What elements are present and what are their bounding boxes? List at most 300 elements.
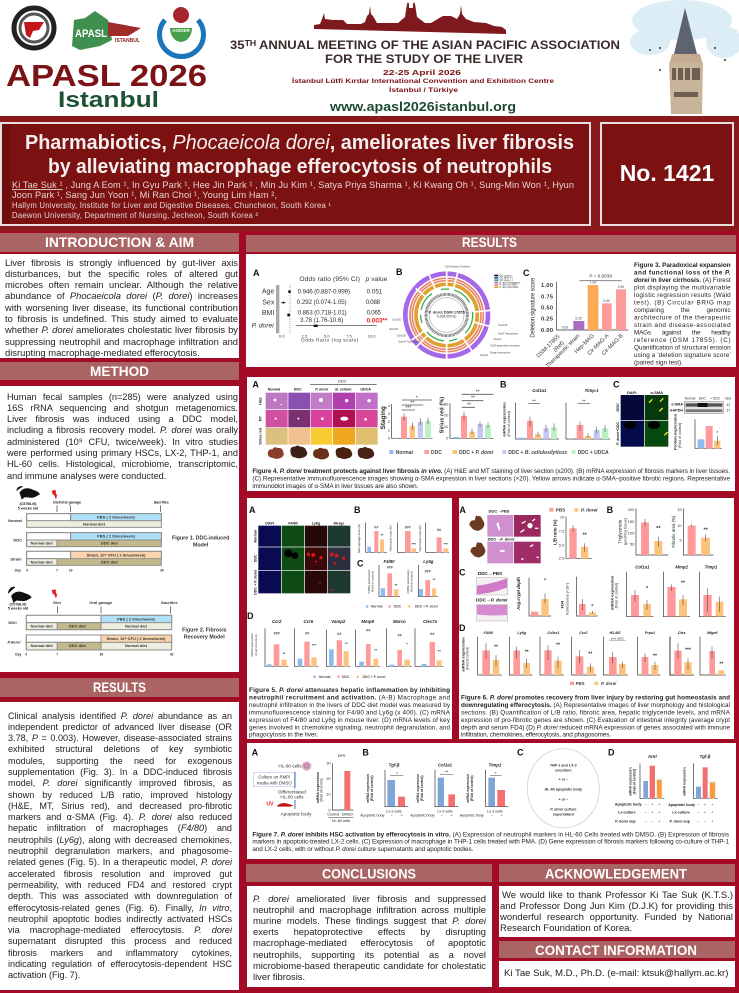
- panel C coculture diagram: [517, 748, 599, 828]
- immunofluorescence: [613, 379, 668, 447]
- authors: Joon Park ¹, Sang Jun Yoon ¹, Mi Ran Choi ¹, Young Lim Ham ²,: [12, 190, 277, 200]
- conference title line 2: FOR THE STUDY OF THE LIVER: [325, 52, 523, 66]
- mRNA charts panel C: **: [681, 580, 686, 586]
- panel B charts: Apoptotic body: [410, 813, 435, 817]
- header banner: [0, 0, 739, 116]
- Galata tower: [649, 8, 726, 114]
- conference venue: İstanbul Lütfi Kırdar International Convention and Exhibition Centre: [292, 77, 554, 85]
- panel: introduction text: microbes often remain unclear. Although the relative: [5, 279, 238, 290]
- western blot: kDa: [725, 396, 731, 400]
- crypt depth and FD4 charts: FD4: [559, 600, 564, 608]
- heading: acknowledgement: ACKNOWLEDGEMENT: [545, 866, 687, 882]
- panel D gene charts: D: [459, 623, 466, 633]
- heading: contact information: CONTACT INFORMATION: [535, 942, 697, 958]
- immunofluorescence grid: A: [249, 505, 256, 515]
- figure 1 schema: DDC diet: [101, 541, 118, 546]
- panel D charts: mRNA expression: [683, 767, 687, 796]
- immunofluorescence: DAPI: [627, 390, 636, 395]
- panel A chart: 10: [326, 792, 331, 797]
- figure 7 caption: and LX-2 cells, with or without P. dorei culture supernatants and apoptotic bodies.: [252, 846, 474, 853]
- panel D gene charts: mRNA expression: [460, 637, 465, 672]
- figure 6 caption: downregulating efferocytosis. (A) Representative images of liver morphology and histological: [461, 702, 730, 709]
- panel: results text: supernatant disrupted this process and reduced: [8, 936, 232, 946]
- heading: conclusions: CONCLUSIONS: [322, 866, 416, 882]
- panel B charts: +: [451, 813, 453, 817]
- mRNA charts panel C: *: [646, 586, 649, 592]
- histology grid: UDCA: [360, 388, 371, 392]
- mRNA charts panel C: (Fold of control): [615, 583, 619, 608]
- forest plot: Odds Ratio (log scale): [301, 338, 359, 343]
- figure 6 caption: depth and serum FD4) (D) P. dorei reduced mRNA expression of genes associated with immune: [461, 724, 730, 731]
- deletion score bar chart: 0.20: [575, 316, 582, 320]
- panel D charts: −: [697, 820, 699, 824]
- deletion score bar chart: Cir-MAG-A: [587, 333, 611, 357]
- histology grid: H&E: [259, 397, 263, 405]
- figure 2 schema: 7: [56, 652, 58, 656]
- affiliations: Daewon University, Department of Nursing, Jecheon, South Korea ²: [12, 211, 258, 220]
- panel A liver and histology: A: [459, 505, 466, 515]
- figure 1 schema: 0: [26, 568, 28, 572]
- forest plot: Age: [262, 289, 274, 296]
- panel B charts: −: [441, 813, 443, 817]
- staging chart: 1: [388, 427, 391, 432]
- forest plot: BMI: [262, 310, 274, 317]
- mRNA charts panel C: Timp1: [705, 564, 718, 569]
- panel: introduction text: suppressing neutrophil and macrophage infiltration and: [5, 336, 238, 347]
- figure 4 legend: DDC + P. dorei: [459, 450, 494, 456]
- panel D charts: Tgf-β: [700, 754, 711, 759]
- figure 6 bottom legend: P. dorei: [601, 681, 617, 686]
- panel D charts: *: [406, 643, 408, 647]
- figure 6 caption: expression of pro-fibrotic genes are shown. (C) Evaluation of intestinal integrity (average crypt: [461, 717, 730, 724]
- figure 2 schema: DDC: [8, 620, 17, 625]
- panel: results text: [0, 702, 239, 990]
- sirius red chart: 20: [444, 413, 449, 418]
- figure 3 caption: logistic regression results (Wald: [634, 292, 731, 299]
- panel A liver and histology: [459, 505, 541, 563]
- panel D gene charts: **: [494, 644, 498, 650]
- panel: results text: modules, supporting the need for exogenous: [8, 756, 232, 766]
- panel: results text: via macrophage-mediated efferocytosis. P. dorei: [8, 925, 232, 935]
- forest plot: 0.088: [366, 299, 380, 306]
- panel A schematic: Culture on RMPI: [258, 774, 290, 779]
- figure 2 schema: PBS ( 2 times/week): [117, 616, 156, 621]
- panel C gut morphology: [459, 568, 508, 621]
- panel D charts: +: [711, 803, 713, 807]
- panel C coculture diagram: P. dorei culture: [550, 807, 576, 811]
- panel D charts: Arnt: [647, 754, 657, 759]
- panel C charts: ###: [425, 569, 431, 573]
- mRNA charts panel C: Col1a1: [635, 564, 650, 569]
- staging chart: [380, 395, 432, 441]
- panel B charts: Col1a1: [438, 762, 453, 767]
- panel D gene charts: **: [525, 649, 529, 655]
- panel C charts: C: [357, 558, 364, 568]
- deletion score bar chart: 0.25: [541, 317, 553, 323]
- figure 1 schema: (C57BL/6): [19, 502, 37, 506]
- panel: figure 6: [459, 498, 734, 739]
- figure 7 caption: [252, 832, 729, 853]
- figure 2 schema: Day: [15, 652, 22, 656]
- panel: introduction text: disturbances, but the specific roles of altered gut: [5, 268, 238, 279]
- panel D charts: +: [704, 803, 706, 807]
- conference website: www.apasl2026istanbul.org: [329, 99, 516, 114]
- panel A schematic: media with DMSO: [257, 780, 292, 785]
- panel A chart: Control: [327, 812, 339, 816]
- L/B ratio chart: L/B ratio (%): [553, 519, 558, 545]
- figure 4 legend: DDC + B. cellulosilyticus: [508, 450, 567, 456]
- panel C gut morphology: DDC→PBS: [478, 571, 502, 576]
- panel B charts: Tgf-β: [389, 762, 400, 767]
- L/B ratio chart: [553, 514, 592, 561]
- panel: conclusions text: liver fibrosis.: [253, 971, 305, 982]
- deletion score bar chart: 0.00: [562, 325, 568, 329]
- panel B charts: +: [501, 813, 503, 817]
- mRNA charts: [500, 379, 610, 439]
- panel B charts: Triglyceride: [618, 519, 623, 544]
- sky watercolor: [630, 0, 739, 58]
- panel C coculture diagram: + or −: [558, 798, 568, 802]
- L/B ratio chart: 5.0: [559, 543, 565, 548]
- whole liver photos: [268, 446, 374, 460]
- panel C coculture diagram: coculture: [555, 768, 572, 772]
- panel: method: including a fibrosis recovery model. P. dorei was orally: [7, 425, 238, 435]
- panel C charts: mRNA expression: [406, 569, 410, 594]
- deletion score bar chart: DSM-17855: [536, 334, 561, 359]
- figure 1 schema: 5 weeks old: [18, 506, 38, 510]
- panel: results text: shown by reduced L/B ratio, improved histology: [8, 790, 232, 800]
- forest plot: 0.292 (0.074-1.05): [297, 299, 347, 306]
- heading: results left: RESULTS: [93, 679, 146, 695]
- figure 2 schema: 5 weeks old: [8, 606, 28, 610]
- panel B charts: 200: [628, 507, 635, 512]
- deletion score bar chart: P = 0.0039: [589, 274, 612, 279]
- panel B charts: Fibrotic area (%): [671, 515, 676, 548]
- panel D charts: +: [711, 811, 713, 815]
- figure 5 caption: expression of F4/80 and Ly6g in mouse liver. (D) mRNA levels of key: [249, 717, 451, 724]
- poster number: No. 1421: [620, 160, 714, 186]
- forest plot: 0.0: [279, 333, 285, 338]
- panel B charts: [354, 505, 449, 553]
- panel B charts: mRNA expression: [366, 774, 370, 803]
- panel C coculture diagram: HL-60 apoptotic body: [545, 788, 583, 792]
- panel B charts: Lx-2 cells: [437, 809, 453, 813]
- panel B charts: ##: [437, 528, 441, 532]
- figure 3 caption: Figure 3. Paradoxical expansion: [634, 262, 731, 269]
- panel: acknowledgement text: We would like to thank Professor Ki Tae Suk (K.T.S.): [502, 890, 733, 900]
- panel A chart: DPS: [338, 754, 346, 758]
- western blot: 37: [726, 408, 730, 412]
- panel D charts: ##: [430, 632, 434, 636]
- immunofluorescence grid: DDC + P. dorei: [253, 570, 257, 595]
- deletion score bar chart: [523, 268, 628, 369]
- figure 2 schema: Normal diet: [31, 623, 53, 628]
- figure 4 caption: [252, 468, 730, 490]
- logo wordmark APASL 2026: APASL 2026: [6, 58, 207, 93]
- deletion score bar chart: 0.60: [603, 299, 610, 303]
- panel C charts: F4/80: [383, 559, 395, 564]
- figure 1 schema: PBS ( 2 times/week): [97, 514, 136, 519]
- deletion score bar chart: C: [523, 268, 530, 278]
- panel D charts: Apoptotic body: [615, 802, 643, 806]
- title band background: [0, 116, 739, 231]
- panel B charts: (Fold of control): [370, 776, 374, 801]
- figure 6 caption: infiltration, chemokines, efferocytosis, and phagosomes.: [461, 731, 611, 738]
- panel: results text: (H&E, MT, Sirius red), and decreased pro-fibrotic: [8, 801, 232, 811]
- panel A schematic: UV: [267, 802, 274, 808]
- figure 1 schema: Normal diet: [31, 559, 53, 564]
- figure 3 caption: MAGs against the healthy: [634, 329, 731, 336]
- panel: method: [0, 386, 239, 672]
- panel A schematic: A: [252, 748, 259, 758]
- immunofluorescence grid: F4/80: [288, 521, 298, 525]
- panel D charts: Apoptotic body: [668, 803, 696, 807]
- panel B charts: B: [607, 505, 614, 515]
- figure 5 caption: genes involved in chemokine signaling, neutrophil degranulation, and: [249, 724, 450, 731]
- panel: figure 5: [247, 498, 452, 739]
- BRIG circular genome map: SusC/D: [392, 318, 402, 322]
- BRIG circular genome map: Glycan: [493, 337, 502, 341]
- BRIG circular genome map: SusC/D: [389, 327, 398, 331]
- figure 2 schema: Figure 2. Fibrosis: [182, 628, 227, 634]
- heading: introduction and aim: INTRODUCTION & AIM: [45, 234, 194, 250]
- panel B charts: 15: [677, 507, 682, 512]
- histology grid: [252, 379, 378, 445]
- western blot: *: [716, 431, 718, 437]
- figure 2 schema: DDC diet: [69, 643, 86, 648]
- panel B charts: −: [391, 813, 393, 817]
- panel: results text: accelerated fibrosis resolution and improved gut: [8, 869, 232, 879]
- panel C coculture diagram: THP-1 and LX-2: [550, 763, 577, 767]
- mRNA charts: **: [582, 399, 586, 404]
- panel D charts: **: [283, 652, 286, 656]
- panel: results text: permeability, with reduced FD4 and restored crypt: [8, 880, 232, 890]
- figure 3 caption: using a 'deletion signature score': [634, 352, 731, 359]
- figure 4 caption: Figure 4. P. dorei treatment protects against liver fibrosis in vivo. (A) H&E and MT staining of liver section (x200). (B) mRNA expression of fibrosis markers in liver tissues.: [252, 468, 730, 475]
- western blot: 42: [726, 403, 730, 407]
- staging chart: ***: [405, 405, 411, 411]
- panel C charts: DDC: [394, 605, 402, 609]
- panel: results text: Clinical analysis identified P. dorei abundance as an: [8, 710, 232, 720]
- figure 3 caption: plot displaying the multivariable: [634, 284, 731, 291]
- panel: acknowledgement text: [499, 886, 735, 937]
- panel D charts: **: [438, 649, 441, 653]
- mRNA charts: Col1a1: [532, 388, 547, 393]
- logo: AGIDER: [160, 7, 204, 57]
- figure 2 schema: (C57BL/6): [9, 602, 27, 606]
- figure 3 caption: Quantification of structural erosion: [634, 344, 731, 351]
- panel: contact text: [499, 961, 735, 987]
- conference date: 22-25 April 2026: [383, 68, 461, 77]
- forest plot: 0.051: [367, 288, 383, 295]
- mRNA charts: Timp-1: [585, 388, 599, 393]
- figure 3 caption: [634, 262, 731, 366]
- deletion score bar chart: (Ref): [553, 340, 566, 354]
- panel: introduction text: to fibrosis is undefined. This study aimed to evaluate: [5, 313, 238, 324]
- panel: acknowledgement text: Research Foundation of Korea.: [500, 923, 632, 934]
- logo: APASL Istanbul: ISTANBUL: [115, 38, 140, 44]
- panel: introduction text: whether P. dorei ameliorates cholestatic liver fibrosis by: [5, 324, 238, 335]
- panel B charts: [607, 505, 713, 555]
- heading: results left: [0, 678, 239, 697]
- figures 1 and 2: study design: [7, 486, 229, 656]
- deletion score bar chart: 0.90: [618, 285, 624, 289]
- panel D charts: −: [651, 820, 653, 824]
- figure 4 legend: Normal: [396, 450, 414, 456]
- mRNA charts panel C: Mmp2: [675, 564, 689, 569]
- panel A schematic: HL-60 cells: [280, 795, 304, 800]
- panel C charts: **: [433, 578, 436, 582]
- panel: figure 3: [246, 254, 736, 367]
- panel D charts: P. dorei sup: [670, 820, 691, 824]
- figure 2 schema: P.dorei: [7, 639, 21, 644]
- panel C charts: Normal: [371, 605, 383, 609]
- figure 2 schema: Diet: [53, 600, 61, 605]
- BRIG circular genome map: [389, 264, 521, 361]
- figure 5 caption: phagocytosis in the liver.: [249, 731, 318, 738]
- western blot: DDC: [699, 396, 707, 400]
- panel: acknowledgement text: wonderful research opportunity. Funded by National: [500, 912, 733, 923]
- figure 3 caption: strain and disease-associated: [634, 322, 731, 329]
- panel D charts: Ccr5: [304, 619, 314, 624]
- figure 2 schema: Strain, 10⁹ CFU ( 2 times/week): [107, 636, 166, 641]
- histology grid: Sirius red: [259, 428, 263, 445]
- sirius red chart: Sirius red (%): [439, 397, 445, 433]
- panel: conclusions text: murine models. These findings suggest that P. dorei: [253, 915, 486, 926]
- panel D gene charts: Cx3cr1: [547, 631, 559, 635]
- crypt depth and FD4 charts: *: [544, 577, 547, 584]
- panel B charts: (Fold of control): [420, 776, 424, 801]
- forest plot: p value: [365, 276, 388, 283]
- panel D charts: +: [658, 802, 660, 806]
- panel: method: administered (10⁹ CFU, twice/week). In vitro studies: [7, 437, 238, 447]
- western blot: GAPDH: [670, 408, 683, 412]
- panel: acknowledgement text: and Professor Dong Jun Kim (D.J.K) for providing this: [500, 901, 733, 912]
- figure 3 caption: and functional loss of the P.: [634, 270, 731, 277]
- figure 4 caption: immunoblot images of α-SMA in liver tissues are also shown.: [252, 483, 419, 490]
- deletion score bar chart: 0.00: [541, 328, 553, 334]
- mRNA charts: B: [500, 379, 507, 389]
- immunofluorescence grid: [249, 505, 350, 595]
- forest plot: 7.5: [346, 333, 353, 338]
- sirius red chart: **: [467, 402, 471, 408]
- figure 3 caption: dorei in liver cirrhosis. (A) Forest: [634, 277, 731, 284]
- BRIG circular genome map: B: [396, 267, 403, 277]
- panel B charts: Apoptotic body: [360, 813, 385, 817]
- panel D charts: −: [645, 820, 647, 824]
- authors: [12, 180, 574, 200]
- panel D charts: D: [247, 611, 254, 621]
- panel C charts: (Fold of control): [371, 571, 375, 592]
- panel: results text: neutrophils (Ly6g), along with decreased chemokines,: [8, 835, 232, 845]
- forest plot: P. dorei: [252, 323, 274, 330]
- panel D charts: [608, 748, 718, 824]
- panel A schematic: Differentiated: [278, 789, 306, 794]
- panel: introduction text: disrupting macrophage-mediated efferocytosis.: [5, 347, 200, 358]
- western blot: Normal: [685, 396, 696, 400]
- staging chart: 0: [388, 436, 391, 441]
- immunofluorescence grid: DAPI: [265, 521, 274, 525]
- BRIG circular genome map: SusC/D: [498, 323, 508, 327]
- panel D charts: −: [645, 802, 647, 806]
- histology grid: DDC: [338, 379, 347, 384]
- figure 2 schema: Oral gavage: [89, 600, 113, 605]
- panel: conclusions text: P. dorei ameliorated liver fibrosis and suppressed: [253, 892, 486, 904]
- BRIG circular genome map: Glycan: [480, 353, 489, 357]
- deletion score bar chart: 1.00: [541, 283, 553, 289]
- panel B charts: 150: [628, 519, 635, 524]
- panel: results text: activation (Fig. 7).: [8, 970, 80, 980]
- heading: method: [0, 362, 239, 380]
- figure 3 caption: reference (DSM 17855). (C): [634, 337, 731, 344]
- panel B charts: ***: [412, 543, 416, 547]
- panel A chart: HL-60 cells: [332, 819, 350, 823]
- panel: contact text: Ki Tae Suk, M.D., Ph.D. (e-mail: ktsuk@hallym.ac.kr): [504, 968, 728, 979]
- figure 6 top legend: [549, 508, 598, 513]
- panel D charts: +: [651, 802, 653, 806]
- panel D charts: D: [608, 748, 615, 758]
- figure 1 schema: Normal diet: [31, 541, 53, 546]
- panel B charts: **: [656, 526, 661, 532]
- panel D charts: (Fold of control): [254, 634, 258, 656]
- immunofluorescence grid: DDC: [253, 554, 257, 562]
- panel: results text: neutrophil apoptotic bodies indirectly activated HSCs: [8, 914, 232, 924]
- panel D charts: Lx-culture: [672, 811, 690, 815]
- panel: method: were performed using primary HSCs, LX-2, THP-1, and: [7, 448, 238, 458]
- panel A chart: (Fold of control): [320, 778, 324, 802]
- figure 2 schema: Normal diet: [31, 643, 53, 648]
- panel B charts: mRNA expression: [416, 774, 420, 803]
- affiliations: [12, 201, 331, 220]
- panel C charts: **: [395, 583, 398, 587]
- panel D charts: mRNA expression: [629, 767, 633, 796]
- panel B charts: −: [491, 813, 493, 817]
- forest plot: 10.0: [368, 333, 376, 338]
- panel: conclusions text: neutrophils, supporting its potential as a novel: [253, 949, 486, 960]
- panel D gene charts: ***: [685, 648, 691, 654]
- panel D charts: +: [651, 811, 653, 815]
- mRNA charts: mRNA expression: [502, 402, 507, 437]
- sirius red chart: 10: [444, 424, 449, 429]
- panel: title: [0, 122, 591, 226]
- panel A chart: 30: [326, 761, 331, 766]
- figure 6 bottom legend: [570, 681, 617, 686]
- panel: results text: markers and α-SMA (Fig. 4). P. dorei also reduced: [8, 812, 232, 822]
- deletion score bar chart: Hep-MAG: [574, 333, 596, 355]
- panel: method: Human fecal samples (n=285) were analyzed using: [7, 392, 238, 402]
- panel D charts: (Fold of control): [632, 769, 636, 794]
- poster number: [600, 122, 734, 226]
- panel: method: Liver fibrosis was induced using a DDC model,: [7, 414, 238, 424]
- panel D charts: −: [704, 820, 706, 824]
- panel D charts: Marco: [393, 619, 406, 624]
- figure 1 schema: 30: [160, 568, 164, 572]
- figure 1 schema: Normal diet: [83, 521, 106, 526]
- staging chart: *: [416, 395, 418, 401]
- sirius red chart: 30: [444, 401, 449, 406]
- panel C charts: mRNA expression: [367, 569, 371, 594]
- panel B charts: **: [445, 770, 449, 775]
- forest plot: 2.5: [302, 333, 308, 338]
- panel D charts: **: [374, 649, 378, 653]
- panel A liver and histology: DDC→PBS: [489, 508, 510, 513]
- panel D charts: Normal: [319, 675, 331, 679]
- figure 2 schema: Sacrifice: [161, 600, 178, 605]
- panel: introduction text: abundance of Phocaeicola dorei (P. dorei) increases: [5, 290, 238, 301]
- deletion score bar chart: 0.50: [541, 305, 553, 311]
- staging chart: **: [410, 400, 414, 406]
- sirius red chart: 0: [446, 436, 449, 441]
